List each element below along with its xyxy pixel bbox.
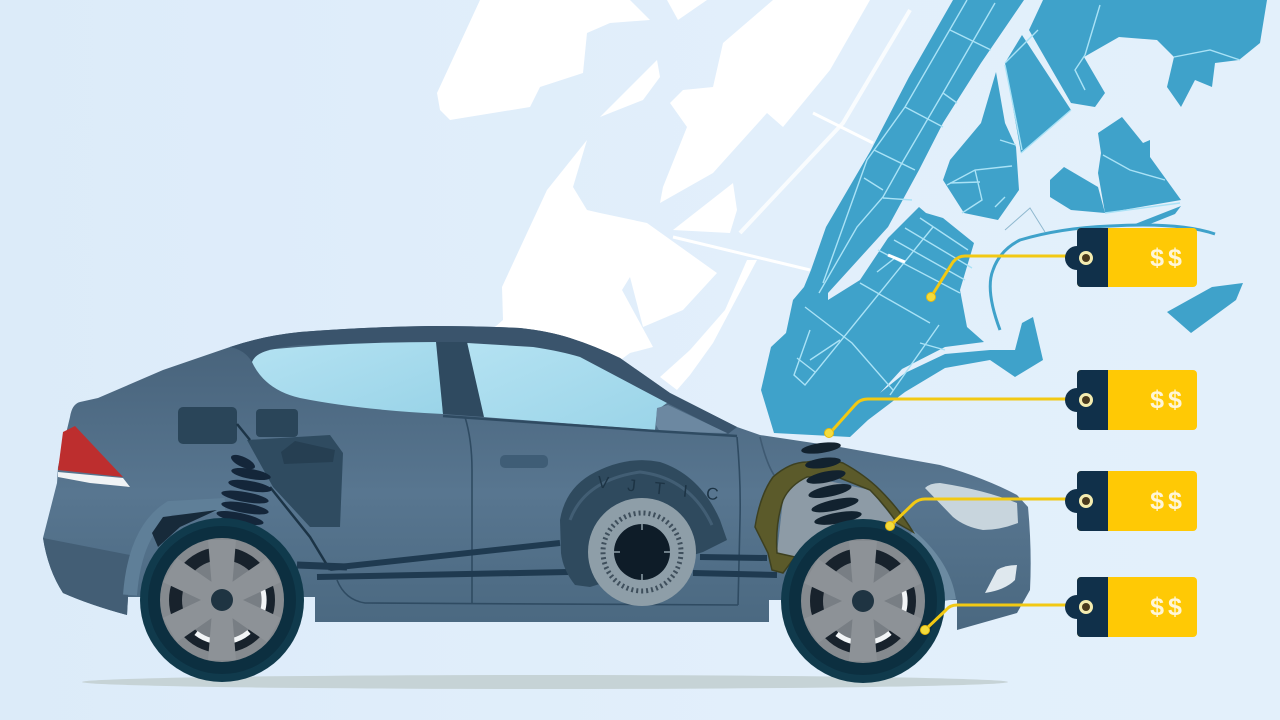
map: blue city districts — [761, 0, 1267, 437]
headlight — [925, 483, 1018, 530]
housing lettering: V J T I C — [597, 473, 726, 505]
front brake disc — [777, 477, 897, 570]
rear strut and link — [237, 424, 330, 570]
car body — [43, 326, 1031, 630]
door pillar — [436, 342, 484, 417]
rear boxes — [178, 407, 298, 444]
price tag 3 — [1065, 471, 1197, 531]
lower window line and door seams — [337, 416, 778, 605]
tail light strip — [58, 472, 130, 487]
price tag 4 — [1065, 577, 1197, 637]
leader dots — [824, 292, 936, 634]
rear coil spring — [215, 452, 273, 528]
rear wheel — [140, 518, 304, 682]
front coil spring — [800, 440, 863, 528]
price tag 4: $$ — [1150, 593, 1186, 621]
rear side window — [252, 342, 443, 414]
suspension rails — [297, 543, 777, 577]
tail light — [58, 426, 123, 477]
price tag 1 — [1065, 228, 1197, 287]
front fender lighter band — [910, 535, 950, 600]
spare wheel housing — [560, 460, 727, 587]
map: street lines — [794, 0, 1240, 395]
fuel tank — [247, 435, 343, 527]
price tag 2 — [1065, 370, 1197, 430]
leader lines — [830, 256, 1072, 630]
rear wheel arch band — [130, 505, 225, 595]
price tag 2: $$ — [1150, 386, 1186, 414]
front side window — [467, 343, 667, 430]
map: water channels and coastal arcs — [990, 208, 1215, 330]
roof rail — [230, 326, 737, 434]
wing mirror — [656, 405, 727, 433]
rear inner arch — [152, 510, 217, 547]
fog light — [985, 565, 1017, 593]
price tag 1: $$ — [1150, 244, 1186, 272]
map: white land west of the river — [437, 0, 910, 390]
olive wheel arch liner — [755, 460, 913, 573]
front wheel — [781, 519, 945, 683]
lower rear bumper — [43, 538, 130, 615]
car — [43, 326, 1031, 683]
price tag 3: $$ — [1150, 487, 1186, 515]
door handle — [500, 455, 548, 468]
spare wheel — [588, 498, 696, 606]
ground shadow — [82, 675, 1008, 689]
